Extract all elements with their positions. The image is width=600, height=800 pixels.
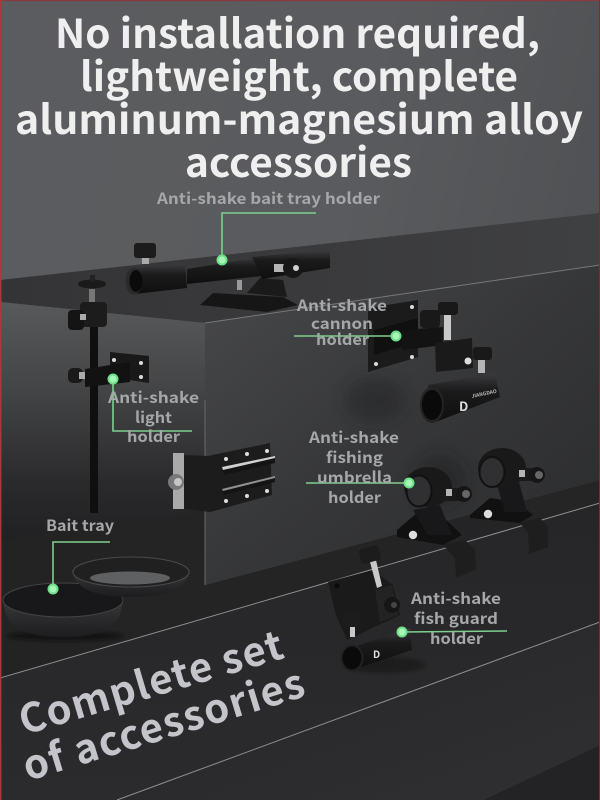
callout: fishing umbrella holder xyxy=(306,426,414,508)
callout: fish guard holder: Anti-shake xyxy=(410,587,501,609)
object: cannon holder: JIANGDAO xyxy=(471,388,498,400)
object: light holder pole xyxy=(68,275,149,513)
callout: cannon holder xyxy=(294,294,400,350)
object: fish guard holder: D xyxy=(373,646,380,661)
callout: cannon holder: Anti-shake xyxy=(296,294,387,316)
object: cannon holder: D xyxy=(459,396,468,415)
object: bait tray xyxy=(3,557,190,641)
callout: cannon holder: cannon xyxy=(311,312,373,334)
title xyxy=(15,2,583,189)
callout: fishing umbrella holder: holder xyxy=(328,486,381,508)
title: aluminum-magnesium alloy xyxy=(15,88,583,146)
heading: complete set of accessories: of accessories xyxy=(15,652,311,792)
callout: fish guard holder: fish guard xyxy=(414,607,498,629)
callout: bait tray holder xyxy=(156,187,380,264)
callout: fish guard holder xyxy=(398,587,507,649)
callout: fish guard holder: holder xyxy=(430,627,483,649)
callout: bait tray: Bait tray xyxy=(46,514,114,536)
callout: light holder: Anti-shake xyxy=(107,386,199,408)
object: cannon holder xyxy=(345,300,500,423)
callout: bait tray holder: Anti-shake bait tray holder xyxy=(156,187,380,209)
callout: fishing umbrella holder: umbrella xyxy=(317,466,392,488)
object: bait tray holder xyxy=(126,243,330,312)
callout: fishing umbrella holder: fishing xyxy=(326,446,383,468)
title: accessories xyxy=(185,131,412,189)
callout: light holder: light xyxy=(135,406,172,428)
callout: cannon holder: holder xyxy=(316,328,369,350)
callout: bait tray xyxy=(46,514,114,594)
callout: fishing umbrella holder: Anti-shake xyxy=(308,426,399,448)
callout: light holder: holder xyxy=(127,425,180,447)
callout: light holder xyxy=(107,374,199,447)
object: side bracket xyxy=(168,443,275,512)
heading: complete set of accessories: Complete set xyxy=(11,613,289,747)
object: fish guard holder xyxy=(328,545,425,673)
object: fishing umbrella holder xyxy=(397,448,548,578)
title: No installation required, xyxy=(55,2,540,60)
title: lightweight, complete xyxy=(80,45,518,103)
